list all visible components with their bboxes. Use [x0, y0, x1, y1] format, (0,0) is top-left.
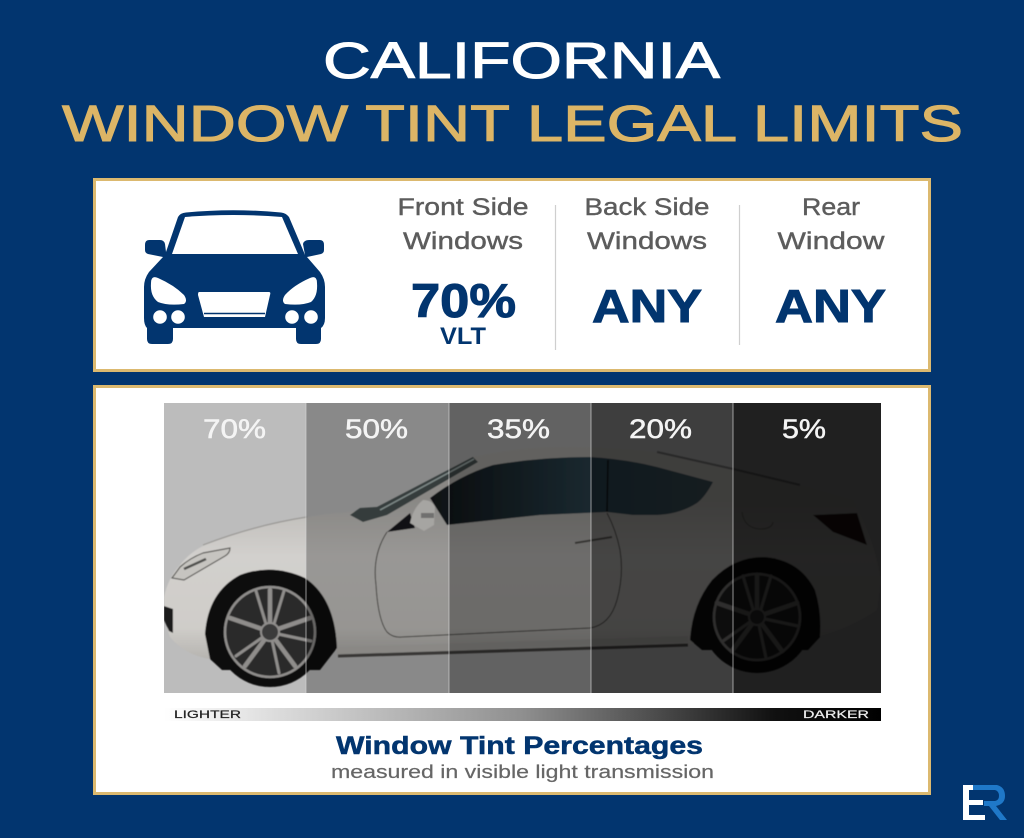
- tint percentage labels: 5%: [782, 414, 826, 444]
- column: back side windows: Back Side: [584, 194, 710, 221]
- car photo with tint strips: [164, 403, 881, 693]
- column: front side windows: Front Side: [398, 194, 528, 221]
- lighter to darker scale: [164, 708, 881, 721]
- rear light: [813, 513, 867, 545]
- lighter to darker scale: DARKER: [803, 709, 869, 721]
- column: rear window: [775, 194, 886, 332]
- hood crease: [203, 517, 307, 545]
- column: front side windows: Windows: [403, 228, 523, 255]
- column: rear window: Rear: [802, 194, 860, 221]
- side sill: [338, 636, 688, 653]
- column: rear window: ANY: [775, 280, 886, 332]
- title: WINDOW TINT LEGAL LIMITS: [62, 95, 963, 152]
- car side view: [164, 447, 881, 687]
- rear spoiler edge: [657, 452, 800, 485]
- rear wheel: [712, 572, 802, 674]
- column: back side windows: [584, 194, 710, 332]
- column: front side windows: VLT: [440, 323, 486, 350]
- car body: [164, 456, 818, 660]
- rear quarter pillar: [607, 460, 608, 512]
- caption heading: Window Tint Percentages: [336, 732, 703, 760]
- mirror: [410, 500, 435, 531]
- title: [62, 32, 963, 152]
- fuel door: [742, 512, 773, 529]
- panel: tint percentages: [94, 386, 930, 794]
- caption subtext: measured in visible light transmission: [331, 762, 714, 782]
- front vent: [164, 606, 173, 633]
- headlight: [172, 548, 230, 580]
- tint percentage labels: 50%: [345, 414, 408, 444]
- icon: car front: [144, 210, 325, 344]
- front wheel: [222, 584, 317, 688]
- title: CALIFORNIA: [323, 32, 720, 89]
- tint percentage labels: 35%: [487, 414, 550, 444]
- windshield wiper strip: [350, 457, 478, 522]
- lighter to darker scale: LIGHTER: [174, 709, 241, 721]
- tint percentage labels: 70%: [203, 414, 266, 444]
- column: front side windows: 70%: [411, 274, 516, 327]
- door outline: [375, 513, 621, 637]
- panel: legal limits: [94, 180, 930, 370]
- wheel arches: [205, 570, 337, 670]
- column: back side windows: Windows: [587, 228, 707, 255]
- door handle: [575, 537, 612, 543]
- logo: [963, 785, 1007, 820]
- column: back side windows: ANY: [592, 280, 702, 332]
- small triangle window: [387, 513, 415, 532]
- side window: [430, 457, 713, 525]
- column: front side windows: [398, 194, 528, 350]
- column: rear window: Window: [778, 228, 885, 255]
- tint percentage labels: 20%: [629, 414, 692, 444]
- tint percentage labels: [203, 414, 826, 444]
- tint overlay strips: [306, 403, 881, 693]
